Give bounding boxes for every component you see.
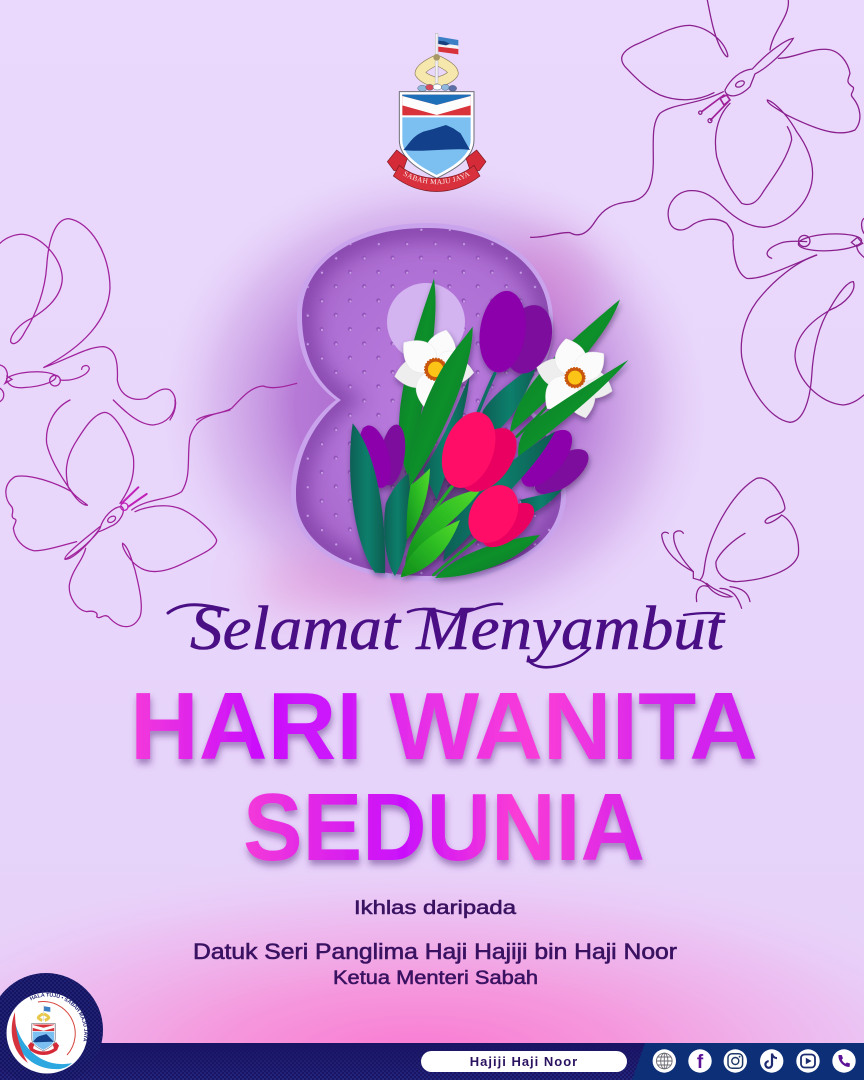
motto scroll: SABAH MAJU JAYA bbox=[403, 172, 470, 184]
back leaves bbox=[399, 278, 620, 500]
daffodil corona bbox=[425, 358, 447, 380]
footer bar bbox=[0, 1043, 864, 1080]
butterfly line art: right edge bbox=[733, 218, 864, 422]
seal: Hala Tuju badge bbox=[0, 973, 103, 1080]
main title: SEDUNIA: SEDUNIA bbox=[243, 774, 645, 881]
icon: video play bbox=[796, 1049, 820, 1073]
butterfly line art: left lower bbox=[6, 383, 297, 627]
main title: HARI WANITA: HARI WANITA bbox=[130, 673, 758, 780]
flag on pole bbox=[435, 33, 458, 83]
name pill bbox=[421, 1051, 627, 1072]
sender title: Ketua Menteri Sabah bbox=[333, 968, 538, 989]
pink tulip lower bbox=[458, 476, 542, 555]
name pill: Hajiji Haji Noor bbox=[470, 1054, 578, 1069]
butterfly line art: top right bbox=[531, 0, 860, 240]
seal curved text: HALA TUJU • SABAH MAJU JAYA bbox=[30, 992, 88, 1042]
white daffodil right bbox=[533, 335, 617, 422]
inner hole of the 8 bbox=[387, 283, 465, 361]
shield bbox=[399, 92, 474, 178]
icon: phone bbox=[832, 1049, 856, 1073]
motto scroll bbox=[387, 150, 486, 192]
tulip bouquet bbox=[350, 278, 628, 578]
daffodil corona bbox=[565, 368, 585, 388]
sender intro: Ikhlas daripada bbox=[354, 898, 517, 919]
white daffodil left bbox=[392, 326, 475, 413]
icon: facebook bbox=[688, 1049, 712, 1073]
wreath bbox=[418, 84, 457, 91]
icon: globe bbox=[653, 1049, 676, 1073]
butterfly line art: left upper bbox=[0, 219, 176, 420]
crest: Sabah coat of arms bbox=[387, 33, 486, 192]
icon: tiktok bbox=[760, 1049, 783, 1073]
sender name: Datuk Seri Panglima Haji Hajiji bin Haji Noor bbox=[193, 939, 677, 964]
raised arms bbox=[420, 54, 453, 83]
mini crest bbox=[28, 1005, 59, 1055]
stems bbox=[415, 373, 547, 575]
pink tulip upper bbox=[432, 405, 528, 502]
butterfly line art: right lower bbox=[662, 478, 799, 608]
numeral 8 with paper cut-out bbox=[291, 223, 566, 581]
right purple tulip bbox=[512, 421, 596, 503]
front leaves bbox=[350, 327, 628, 578]
left purple tulip bbox=[354, 422, 409, 491]
big purple tulip bbox=[474, 288, 560, 379]
icon: facebook: f bbox=[697, 1052, 704, 1073]
icon: instagram bbox=[724, 1049, 747, 1073]
greeting script heading: Selamat Menyambut bbox=[190, 595, 726, 663]
